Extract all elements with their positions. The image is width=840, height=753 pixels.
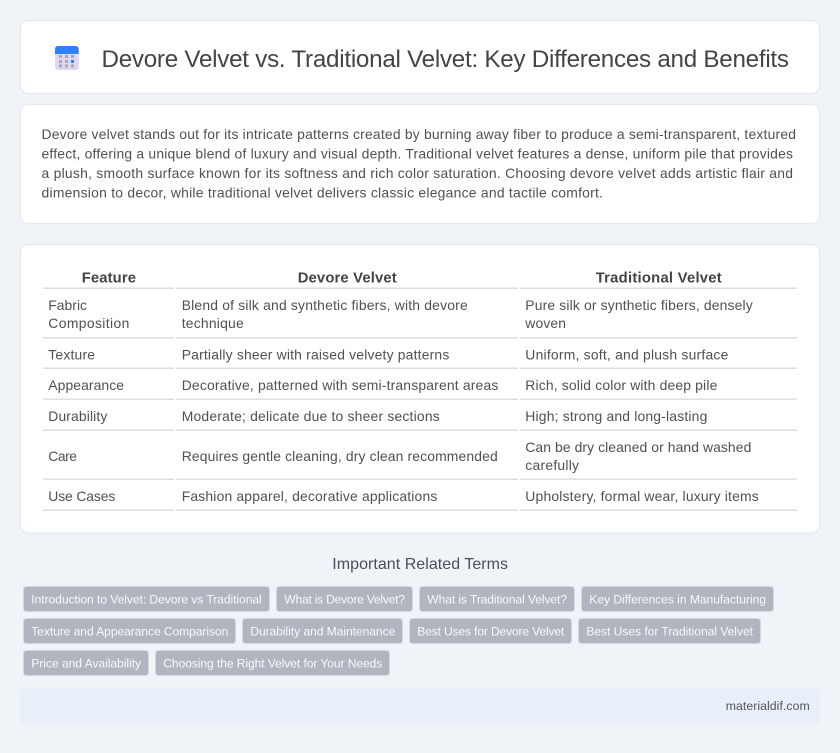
tag: introduction to velvet (24, 586, 270, 612)
table row: durability: High; strong and long-lasting (525, 408, 707, 424)
text block: introduction paragraph: dimension to decor, while traditional velvet delivers classic elegance and tactile comfort. (42, 184, 603, 200)
text block: introduction paragraph: effect, offering a unique blend of luxury and visual depth. Traditional velvet features a dense, uniform pile that provides (42, 146, 793, 162)
table row: fabric composition: Blend of silk and synthetic fibers, with devore (182, 297, 468, 313)
table row: fabric composition: Composition (48, 315, 129, 331)
tag: introduction to velvet: Introduction to Velvet: Devore vs Traditional (31, 592, 262, 606)
table row: durability (48, 408, 707, 424)
tag: key differences in manufacturing (582, 586, 774, 612)
panel: header card (20, 20, 820, 94)
table row: durability: Moderate; delicate due to sheer sections (182, 408, 440, 424)
tag: best uses for devore velvet (410, 618, 572, 644)
table row: care: Requires gentle cleaning, dry clean recommended (182, 448, 498, 464)
tag: choosing the right velvet (156, 650, 390, 676)
table header row (82, 271, 722, 287)
table row: texture: Uniform, soft, and plush surface (525, 346, 729, 362)
panel: comparison table (20, 244, 820, 533)
table row: use cases: Use Cases (48, 488, 115, 504)
table row: texture (48, 346, 729, 362)
table row: use cases: Upholstery, formal wear, luxury items (525, 488, 759, 504)
table row: care: Care (48, 448, 77, 464)
table header row: Traditional Velvet (596, 271, 722, 287)
tag: best uses for traditional velvet: Best Uses for Traditional Velvet (586, 624, 754, 638)
table row: appearance (48, 377, 718, 393)
table row: fabric composition: Fabric (48, 297, 87, 313)
table row: texture: Partially sheer with raised velvety patterns (182, 346, 449, 362)
panel: introduction (20, 104, 820, 224)
table row: durability: Durability (48, 408, 107, 424)
table row: fabric composition: technique (182, 315, 244, 331)
table row: care: carefully (525, 457, 579, 473)
title: Devore Velvet vs. Traditional Velvet: Key Differences and Benefits (102, 46, 789, 73)
table row: appearance: Decorative, patterned with semi-transparent areas (182, 377, 498, 393)
icon: calendar (55, 46, 79, 70)
tag: price and availability: Price and Availability (31, 656, 142, 670)
table row: appearance: Appearance (48, 377, 124, 393)
table row: appearance: Rich, solid color with deep pile (525, 377, 718, 393)
tag: durability and maintenance: Durability and Maintenance (250, 624, 396, 638)
table row: care (48, 439, 751, 473)
tag: what is devore velvet: What is Devore Velvet? (284, 592, 405, 606)
text block: introduction paragraph: a plush, smooth surface known for its softness and rich color saturation. Choosing devore velvet adds artistic flair and (42, 165, 793, 181)
heading: important related terms: Important Related Terms (332, 556, 508, 573)
tag: best uses for traditional velvet (578, 618, 760, 644)
table row: use cases (48, 488, 759, 504)
table row: care: Can be dry cleaned or hand washed (525, 439, 751, 455)
text block: introduction paragraph: Devore velvet stands out for its intricate patterns created by burning away fiber to produce a semi-transparent, textured (42, 126, 796, 142)
table row: fabric composition: woven (524, 315, 566, 331)
tag: price and availability (24, 650, 148, 676)
tag: what is devore velvet (276, 586, 412, 612)
related term tags (24, 586, 774, 676)
table header row: Feature (82, 271, 136, 287)
tag: choosing the right velvet: Choosing the Right Velvet for Your Needs (163, 656, 382, 670)
table row: texture: Texture (48, 346, 95, 362)
footer source text: materialdif.com (726, 699, 810, 713)
table header row: Devore Velvet (298, 271, 397, 287)
footer bar (20, 689, 820, 723)
tag: texture and appearance comparison: Texture and Appearance Comparison (31, 624, 228, 638)
tag: what is traditional velvet (420, 586, 574, 612)
table row: use cases: Fashion apparel, decorative applications (182, 488, 437, 504)
tag: texture and appearance comparison (24, 618, 236, 644)
tag: what is traditional velvet: What is Traditional Velvet? (427, 592, 567, 606)
tag: best uses for devore velvet: Best Uses for Devore Velvet (417, 624, 565, 638)
table row: fabric composition (48, 297, 753, 331)
tag: key differences in manufacturing: Key Differences in Manufacturing (589, 592, 766, 606)
tag: durability and maintenance (242, 618, 402, 644)
table row: fabric composition: Pure silk or synthetic fibers, densely (525, 297, 753, 313)
